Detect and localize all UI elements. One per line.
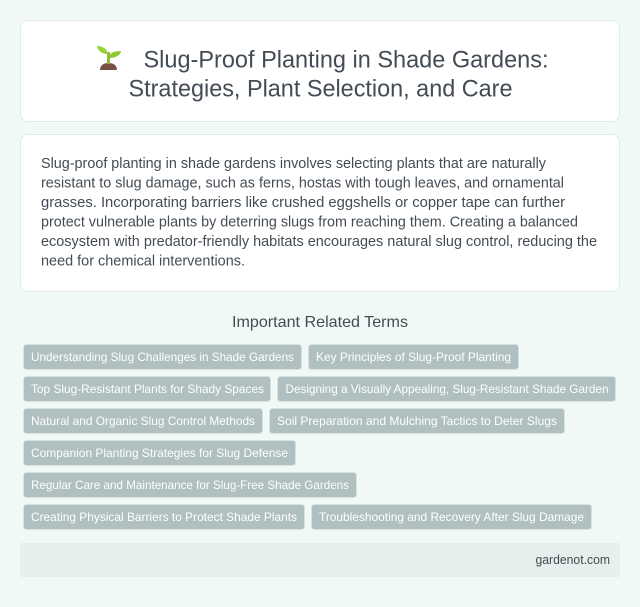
related terms tags: Key Principles of Slug-Proof Planting: [316, 350, 511, 364]
related terms heading: Important Related Terms: [232, 314, 408, 331]
related terms tags: Designing a Visually Appealing, Slug-Resistant Shade Garden: [286, 382, 608, 396]
related terms tags: Creating Physical Barriers to Protect Shade Plants: [31, 510, 297, 524]
description text: resistant to slug damage, such as ferns, hostas with tough leaves, and ornamental: [41, 176, 564, 192]
description text: ecosystem with predator-friendly habitats encourages natural slug control, reducing the: [41, 234, 597, 250]
title text: [128, 46, 548, 102]
footer: [20, 543, 620, 577]
description text: Slug-proof planting in shade gardens involves selecting plants that are naturally: [41, 156, 547, 172]
footer source text: gardenot.com: [536, 553, 610, 567]
title card: [20, 20, 620, 122]
related terms tags: Understanding Slug Challenges in Shade Gardens: [31, 350, 294, 364]
description text: [41, 156, 597, 270]
description text: protect vulnerable plants by deterring slugs from reaching them. Creating a balanced: [41, 214, 578, 230]
description card: [20, 134, 620, 292]
description text: need for chemical interventions.: [41, 254, 245, 270]
title text: Strategies, Plant Selection, and Care: [128, 76, 512, 102]
related terms tags: [24, 344, 616, 530]
description text: grasses. Incorporating barriers like crushed eggshells or copper tape can further: [41, 195, 565, 211]
icon: seedling: [97, 46, 121, 70]
related terms tags: Soil Preparation and Mulching Tactics to Deter Slugs: [277, 414, 557, 428]
related terms tags: Top Slug-Resistant Plants for Shady Spaces: [31, 382, 264, 396]
title text: Slug-Proof Planting in Shade Gardens:: [144, 46, 548, 74]
related terms tags: Companion Planting Strategies for Slug Defense: [31, 446, 288, 460]
related terms tags: Regular Care and Maintenance for Slug-Free Shade Gardens: [31, 478, 349, 492]
related terms tags: Natural and Organic Slug Control Methods: [31, 414, 255, 428]
related terms tags: Troubleshooting and Recovery After Slug Damage: [319, 510, 584, 524]
